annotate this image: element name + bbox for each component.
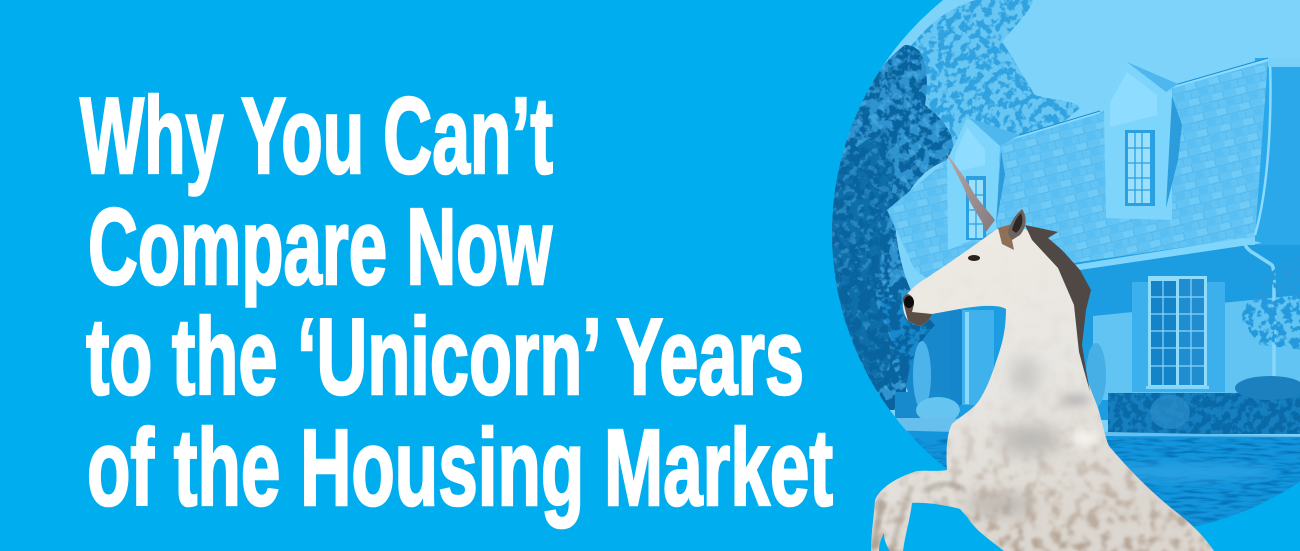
left yard bushes [895, 341, 960, 423]
trees behind house [911, 0, 1080, 147]
horn [946, 152, 995, 232]
clipped hedges [1086, 343, 1300, 434]
title: to the ‘Unicorn’ Years [86, 296, 804, 418]
sky [830, 0, 1300, 440]
title: Compare Now [88, 186, 552, 308]
eye [968, 255, 980, 261]
pine branches in front of left wall [836, 280, 935, 410]
lower wall shaded [945, 245, 1300, 420]
top of wall corner [1268, 58, 1300, 67]
dark fir tree [832, 45, 954, 410]
left dormer [947, 118, 1020, 250]
lawn highlight [1105, 464, 1275, 480]
photo circle: blue-toned house [826, 0, 1300, 551]
ear [1008, 209, 1026, 240]
downpipe [1244, 240, 1274, 380]
mane [1025, 225, 1091, 392]
right dormer [1104, 61, 1182, 220]
paved edge [896, 418, 1300, 437]
body shading [871, 354, 1212, 551]
title: Why You Can’t [80, 75, 553, 197]
sunlit wall [1093, 295, 1300, 400]
shutters and window [1132, 276, 1225, 392]
house wall, right end [1255, 58, 1300, 245]
title: of the Housing Market [87, 407, 833, 529]
front door [960, 310, 994, 405]
mansard roof [887, 58, 1268, 290]
left wall, dark under eave [880, 300, 960, 415]
lawn [906, 430, 1300, 526]
lawn texture [914, 438, 1300, 526]
muzzle [903, 294, 932, 326]
right-side tree [1242, 269, 1300, 350]
title [80, 75, 833, 529]
horse body [871, 229, 1214, 551]
roof ridge and eave trim [1000, 60, 1270, 235]
unicorn [860, 152, 1230, 551]
